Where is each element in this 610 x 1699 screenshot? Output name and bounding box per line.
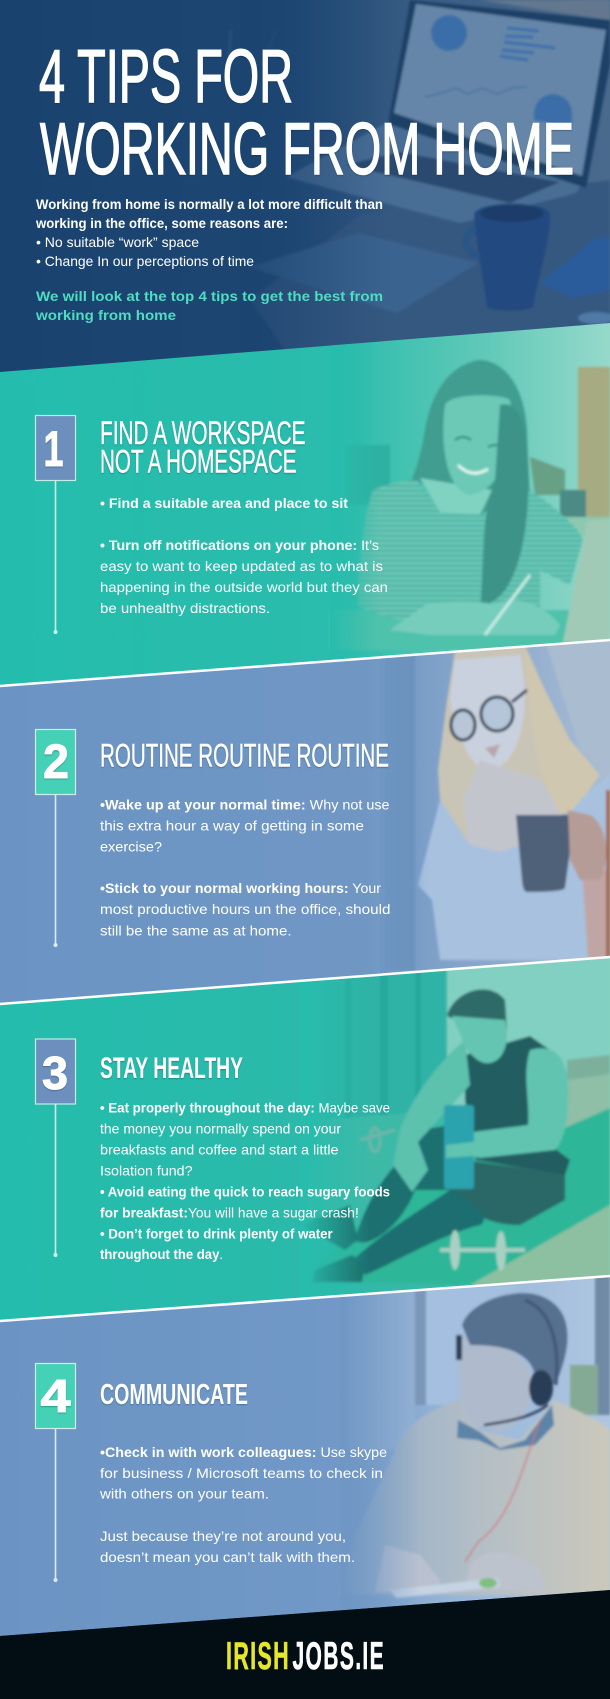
tip 4 body: •Check in with work colleagues: Use skype: [100, 1444, 387, 1460]
heading: routine: ROUTINE ROUTINE ROUTINE: [100, 738, 389, 774]
panel: footer: [0, 1590, 610, 1699]
number badge 2: 2: [43, 736, 69, 789]
panel: tip 4: [0, 1275, 610, 1641]
section divider lines: [0, 640, 610, 1321]
number badge 4: 4: [40, 1370, 71, 1422]
tip 4 body: with others on your team.: [99, 1486, 269, 1502]
tip 3 body: • Avoid eating the quick to reach sugary foods: [100, 1184, 390, 1200]
logo: IrishJobs.ie: JOBS.IE: [292, 1635, 385, 1678]
heading: find a workspace: FIND A WORKSPACE: [100, 415, 306, 451]
title: [39, 34, 574, 190]
title: 4 TIPS FOR: [39, 34, 293, 118]
heading: stay healthy: STAY HEALTHY: [100, 1052, 243, 1085]
tip 2 body: •Wake up at your normal time: Why not use: [100, 796, 390, 812]
tip 2 body: still be the same as at home.: [100, 922, 292, 938]
intro highlight text: We will look at the top 4 tips to get the best from: [36, 288, 383, 304]
tip 2 body: [100, 796, 390, 938]
heading: find a workspace: [100, 415, 306, 480]
timeline line 3: [54, 1104, 58, 1257]
number badge 3: 3: [42, 1047, 68, 1099]
tip 1 body: [100, 495, 388, 616]
photo: woman with glasses holding a mug: [389, 644, 610, 970]
photo: man sitting on a yoga mat with a bottle: [310, 960, 610, 1285]
number badge 4: [36, 1364, 76, 1428]
panel: tip 1: [0, 323, 610, 686]
timeline line 2: [54, 795, 58, 947]
tip 2 body: exercise?: [100, 838, 162, 854]
number badge 3: [36, 1039, 76, 1104]
tip 3 body: for breakfast:You will have a sugar crash!: [100, 1204, 359, 1220]
tip 2 body: most productive hours un the office, should: [100, 901, 390, 917]
tip 3 body: the money you normally spend on your: [100, 1120, 341, 1136]
tip 3 body: Isolation fund?: [100, 1162, 193, 1178]
tip 3 body: throughout the day.: [100, 1246, 223, 1262]
intro text: • No suitable “work” space: [36, 234, 199, 250]
photo: laptop, mug and notebook on a desk: [227, 0, 610, 372]
tip 1 body: • Find a suitable area and place to sit: [100, 495, 348, 511]
number badge 1: 1: [44, 421, 64, 477]
photo: man with a headset writing: [340, 1275, 610, 1641]
intro text: Working from home is normally a lot more difficult than: [36, 196, 383, 212]
intro text: working in the office, some reasons are:: [35, 215, 288, 231]
heading: find a workspace: NOT A HOMESPACE: [100, 444, 296, 480]
tip 1 body: happening in the outside world but they can: [100, 579, 388, 595]
tip 3 body: • Don’t forget to drink plenty of water: [100, 1226, 333, 1242]
number badge 1: [36, 416, 76, 480]
tip 2 body: this extra hour a way of getting in some: [100, 818, 364, 834]
intro highlight text: [35, 288, 383, 323]
intro text: • Change In our perceptions of time: [36, 253, 254, 269]
tip 1 body: • Turn off notifications on your phone: It’s: [100, 537, 379, 553]
timeline line 4: [54, 1429, 58, 1582]
tip 1 body: easy to want to keep updated as to what is: [100, 558, 383, 574]
photo: woman writing at a desk: [329, 343, 610, 650]
panel: tip 2: [0, 640, 610, 1010]
tip 3 body: [100, 1100, 390, 1262]
panel: header: [36, 0, 610, 349]
tip 4 body: [99, 1444, 387, 1565]
logo: IrishJobs.ie: IRISH: [226, 1635, 290, 1678]
tip 1 body: be unhealthy distractions.: [100, 600, 270, 616]
intro highlight text: working from home: [35, 307, 176, 323]
timeline line 1: [54, 481, 58, 634]
intro text: [35, 196, 383, 269]
tip 4 body: doesn’t mean you can’t talk with them.: [100, 1549, 355, 1565]
tip 4 body: Just because they’re not around you,: [100, 1528, 346, 1544]
tip 2 body: •Stick to your normal working hours: Your: [100, 880, 381, 896]
tip 4 body: for business / Microsoft teams to check in: [100, 1465, 383, 1481]
number badge 2: [36, 730, 76, 794]
heading: communicate: COMMUNICATE: [100, 1379, 248, 1411]
tip 3 body: • Eat properly throughout the day: Maybe save: [100, 1100, 390, 1116]
panel: tip 3: [0, 957, 610, 1327]
tip 3 body: breakfasts and coffee and start a little: [100, 1142, 339, 1158]
